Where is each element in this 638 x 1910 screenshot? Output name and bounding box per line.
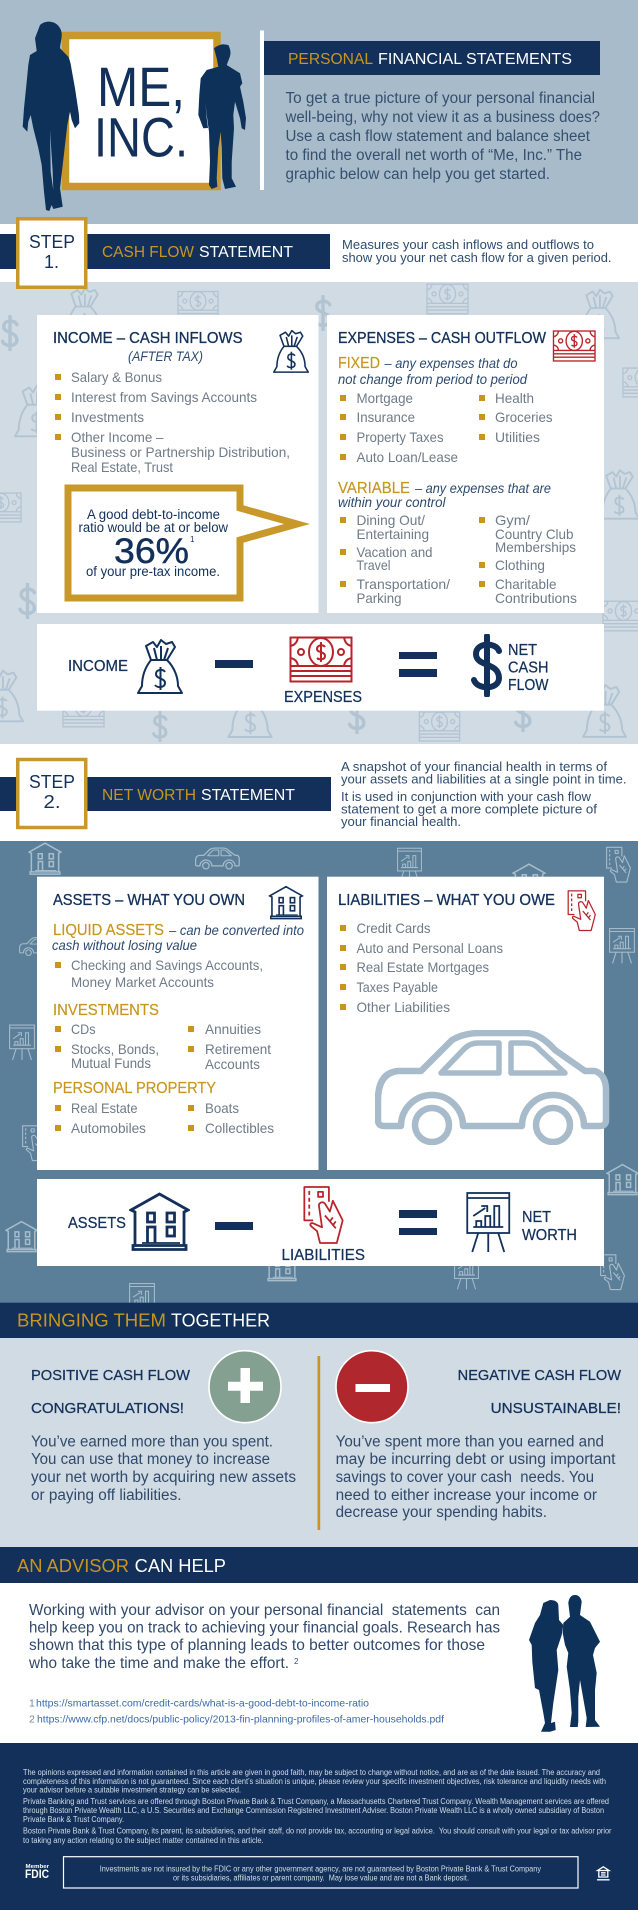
negative cash flow: NEGATIVE CASH FLOW: [458, 1368, 621, 1384]
liquid assets: Checking and Savings Accounts,: [71, 957, 263, 973]
icon: red money: [290, 637, 352, 682]
callout: debt-to-income: of your pre-tax income.: [86, 564, 220, 579]
step 1 navy bar: CASH FLOW: [102, 244, 195, 261]
callout: debt-to-income: 1: [190, 535, 195, 544]
net cash flow label: FLOW: [508, 677, 549, 694]
panel: income: [37, 315, 318, 613]
panel: assets: [37, 877, 318, 1170]
icon: money bag: [274, 331, 308, 372]
intro text: to find the overall net worth of “Me, Inc.” The: [286, 147, 582, 164]
intro text: [285, 90, 600, 183]
step 2 navy bar: STATEMENT: [201, 787, 295, 804]
step 2 box: [18, 760, 86, 828]
equation panel: net worth: [37, 1179, 604, 1266]
intro text: Use a cash flow statement and balance sheet: [286, 128, 591, 145]
negative cash flow: You’ve spent more than you earned and: [336, 1434, 604, 1451]
logo: Member FDIC: Member: [26, 1864, 49, 1870]
section 2 background: [0, 841, 638, 1318]
variable expenses: VARIABLE: [338, 480, 410, 497]
divider: gold line: [318, 1356, 320, 1530]
intro text: well-being, why not view it as a business does?: [285, 109, 600, 126]
negative cash flow: UNSUSTAINABLE!: [491, 1401, 621, 1417]
heading bar: personal financial statements: [264, 41, 600, 75]
disclosures: Private Bank & Trust Company.: [23, 1815, 124, 1824]
variable expenses: Dining Out/: [356, 512, 425, 528]
positive cash flow: your net worth by acquiring new assets: [31, 1469, 296, 1486]
income list: [55, 369, 290, 475]
advisor text: [28, 1602, 500, 1672]
step 1 box: 1.: [44, 252, 59, 272]
step 2 description: your financial health.: [341, 814, 461, 829]
net worth label: WORTH: [522, 1227, 577, 1244]
heading bar: personal financial statements: PERSONAL: [288, 51, 373, 68]
icon: equal housing: [597, 1867, 610, 1880]
heading: bringing them together: TOGETHER: [171, 1310, 270, 1330]
negative cash flow: need to either increase your income or: [336, 1487, 597, 1504]
liabilities list: Taxes Payable: [356, 979, 438, 995]
heading: bringing them together: [0, 1303, 638, 1338]
variable expenses: – any expenses that are: [414, 480, 551, 496]
heading bar: personal financial statements: FINANCIAL STATEMENTS: [378, 51, 572, 68]
positive cash flow: You’ve earned more than you spent.: [31, 1434, 273, 1451]
title: Me, Inc.: INC.: [94, 106, 188, 169]
fixed expenses: – any expenses that do: [384, 355, 518, 371]
variable expenses: Transportation/: [356, 576, 450, 592]
footnote links: 2: [29, 1714, 35, 1726]
icon: minus circle: [336, 1351, 408, 1423]
variable expenses: Memberships: [495, 539, 576, 555]
variable expenses: Clothing: [495, 557, 545, 573]
advisor text: Working with your advisor on your personal financial statements can: [29, 1602, 500, 1619]
liquid assets: cash without losing value: [52, 937, 197, 953]
panel: liabilities: [327, 877, 606, 1170]
negative cash flow: [336, 1351, 621, 1521]
divider line: [260, 30, 264, 190]
income heading: (AFTER TAX): [128, 349, 203, 364]
footnote links: [29, 1698, 444, 1726]
assets label: ASSETS: [68, 1215, 126, 1232]
step 1 box: [18, 219, 86, 287]
fixed expenses: [338, 355, 552, 465]
intro text: graphic below can help you get started.: [286, 166, 550, 183]
equals sign: [399, 652, 437, 677]
investments: Retirement: [205, 1041, 271, 1057]
step 1 description: [342, 237, 612, 265]
net cash flow label: CASH: [508, 660, 548, 676]
liabilities list: Auto and Personal Loans: [356, 940, 503, 956]
fixed expenses: Health: [495, 390, 534, 406]
silhouette: man: [198, 44, 246, 189]
background icon pattern: [0, 284, 638, 741]
minus sign: [215, 1222, 253, 1230]
intro text: To get a true picture of your personal financial: [286, 90, 595, 107]
heading: an advisor can help: AN ADVISOR: [17, 1556, 129, 1576]
liabilities list: Real Estate Mortgages: [356, 959, 489, 975]
negative cash flow: savings to cover your cash needs. You: [336, 1469, 594, 1486]
icon: dollar sign: [474, 636, 499, 695]
investment notice box: [64, 1857, 578, 1888]
footer: [0, 1743, 638, 1910]
personal property: Automobiles: [71, 1120, 146, 1136]
investments: Stocks, Bonds,: [71, 1041, 159, 1057]
icon: car: [378, 1033, 606, 1142]
callout: debt-to-income: 36%: [114, 532, 189, 571]
title: Me, Inc.: [94, 55, 188, 169]
income heading: [53, 330, 242, 364]
disclosures: to taking any action relating to the subject matter contained in this article.: [23, 1836, 264, 1845]
liabilities list: Credit Cards: [356, 920, 430, 936]
investments: [53, 1002, 271, 1072]
investment notice box: Investments are not insured by the FDIC or any other government agency, are not guaranteed by Boston Private Bank & Trust Company: [100, 1865, 541, 1874]
personal property: PERSONAL PROPERTY: [53, 1080, 216, 1097]
income heading: INCOME – CASH INFLOWS: [53, 330, 242, 347]
liquid assets: – can be converted into: [168, 922, 304, 938]
positive cash flow: You can use that money to increase: [31, 1451, 270, 1468]
net cash flow label: [508, 642, 549, 694]
investments: CDs: [71, 1021, 96, 1037]
income list: Real Estate, Trust: [71, 459, 173, 475]
income list: Other Income –: [71, 429, 164, 445]
net cash flow label: NET: [508, 642, 537, 659]
disclosures: completeness of this information is not guaranteed. Since each client’s situation is unique, please review your specific investment objectives, risk tolerance and liquidity needs with: [23, 1777, 606, 1786]
panel: advisor: [0, 1583, 638, 1743]
step 1 band: [0, 224, 638, 282]
investments: INVESTMENTS: [53, 1002, 159, 1019]
fixed expenses: Property Taxes: [356, 429, 444, 445]
section 1 background: [0, 282, 638, 744]
footnote links: https://www.cfp.net/docs/public-policy/2013-fin-planning-profiles-of-amer-households.pdf: [37, 1714, 444, 1726]
heading: bringing them together: BRINGING THEM: [17, 1310, 166, 1330]
positive cash flow: or paying off liabilities.: [31, 1487, 182, 1504]
step 2 description: A snapshot of your financial health in terms of: [341, 759, 607, 774]
fixed expenses: Insurance: [356, 409, 415, 425]
equals sign: [399, 1210, 437, 1235]
positive cash flow: POSITIVE CASH FLOW: [31, 1368, 190, 1384]
negative cash flow: decrease your spending habits.: [336, 1504, 547, 1521]
advisor text: who take the time and make the effort.: [28, 1655, 289, 1672]
fixed expenses: Groceries: [495, 409, 552, 425]
personal property: Real Estate: [71, 1100, 138, 1116]
variable expenses: within your control: [338, 494, 446, 510]
minus sign: [215, 660, 253, 668]
income label: INCOME: [68, 658, 128, 675]
fixed expenses: Mortgage: [356, 390, 413, 406]
panel: bringing them together: [0, 1338, 638, 1547]
income list: Interest from Savings Accounts: [71, 389, 257, 405]
step 2 description: your assets and liabilities at a single point in time.: [341, 772, 626, 786]
heading: an advisor can help: CAN HELP: [135, 1556, 226, 1576]
disclosures: The opinions expressed and information contained in this article are given in good faith, may be subject to change without notice, and are as of the date issued. The accuracy and: [23, 1768, 600, 1777]
icon: red money: [553, 331, 595, 361]
variable expenses: Parking: [356, 590, 402, 606]
equation panel: net cash flow: [37, 624, 604, 711]
variable expenses: Travel: [356, 557, 390, 573]
background icon pattern: [6, 843, 638, 1318]
investment notice box: or its subsidiaries, affiliates or parent company. May lose value and are not a Bank deposit.: [173, 1874, 469, 1883]
investments: Annuities: [205, 1021, 261, 1037]
step 1 navy bar: STATEMENT: [199, 244, 293, 261]
step 2 description: [341, 759, 626, 829]
fixed expenses: Auto Loan/Lease: [356, 449, 458, 465]
liabilities list: Other Liabilities: [356, 999, 450, 1015]
expenses label: EXPENSES: [284, 689, 362, 706]
fixed expenses: FIXED: [338, 355, 380, 372]
variable expenses: Country Club: [495, 526, 574, 542]
step 2 box: 2.: [44, 792, 60, 812]
callout: debt-to-income: A good debt-to-income: [87, 507, 220, 522]
assets heading: ASSETS – WHAT YOU OWN: [53, 892, 245, 909]
logo: Member FDIC: FDIC: [25, 1867, 49, 1881]
variable expenses: Gym/: [495, 512, 530, 528]
advisor text: 2: [294, 1657, 299, 1666]
title: Me, Inc.: ME,: [97, 55, 185, 118]
icon: credit card in hand: [304, 1187, 343, 1243]
icon: credit card in hand: [568, 891, 595, 930]
liquid assets: [52, 922, 304, 990]
silhouette: couple: [529, 1595, 600, 1732]
Me, Inc. logo with silhouettes: [23, 22, 246, 211]
disclosures: [23, 1768, 612, 1845]
step 2 description: statement to get a more complete picture of: [341, 802, 597, 816]
negative cash flow: may be incurring debt or using important: [336, 1451, 616, 1468]
step 1 description: Measures your cash inflows and outflows to: [342, 237, 594, 252]
liquid assets: Money Market Accounts: [71, 974, 214, 990]
variable expenses: [338, 480, 577, 606]
investments: Mutual Funds: [71, 1055, 151, 1071]
panel: expenses: [327, 315, 604, 613]
variable expenses: Vacation and: [356, 544, 432, 560]
footnote links: 1: [29, 1698, 35, 1710]
variable expenses: Entertaining: [356, 526, 429, 542]
net worth label: [522, 1209, 577, 1244]
step 2 description: It is used in conjunction with your cash flow: [341, 789, 592, 804]
step 1 box: STEP: [29, 232, 75, 252]
icon: money bag: [138, 640, 182, 693]
step 2 box: STEP: [29, 772, 75, 792]
personal property: Collectibles: [205, 1120, 274, 1136]
step 1 description: show you your net cash flow for a given period.: [342, 250, 612, 265]
expenses heading: EXPENSES – CASH OUTFLOW: [338, 330, 546, 347]
income list: Salary & Bonus: [71, 369, 162, 385]
fixed expenses: Utilities: [495, 429, 540, 445]
variable expenses: Charitable: [495, 576, 557, 592]
step 2 navy bar: [0, 777, 331, 811]
positive cash flow: CONGRATULATIONS!: [31, 1401, 184, 1417]
callout: debt-to-income: ratio would be at or below: [78, 520, 228, 535]
liabilities heading: LIABILITIES – WHAT YOU OWE: [338, 892, 555, 909]
advisor text: help keep you on track to achieving your financial goals. Research has: [29, 1620, 500, 1637]
liquid assets: LIQUID ASSETS: [53, 922, 164, 939]
icon: house: [270, 887, 302, 919]
investments: Accounts: [205, 1056, 260, 1072]
liabilities label: LIABILITIES: [282, 1247, 365, 1264]
icon: house: [131, 1194, 188, 1250]
income list: Investments: [71, 409, 144, 425]
personal property: Boats: [205, 1100, 239, 1116]
variable expenses: Contributions: [495, 590, 577, 606]
icon: chart on easel: [467, 1193, 509, 1252]
step 2 navy bar: NET WORTH: [102, 787, 196, 804]
step 1 navy bar: [0, 234, 330, 269]
liabilities list: [340, 920, 503, 1015]
step 2 band: [0, 744, 638, 841]
heading: an advisor can help: [0, 1547, 638, 1583]
advisor text: shown that this type of planning leads to better outcomes for those: [29, 1637, 485, 1654]
footnote links: https://smartasset.com/credit-cards/what-is-a-good-debt-to-income-ratio: [36, 1698, 369, 1710]
silhouette: woman: [23, 22, 79, 211]
fixed expenses: not change from period to period: [338, 371, 528, 387]
gold frame: [66, 36, 217, 186]
disclosures: your advisor before a suitable investment strategy can be selected.: [23, 1786, 241, 1795]
header section background: [0, 0, 638, 224]
positive cash flow: [31, 1351, 296, 1504]
personal property: [53, 1080, 274, 1136]
net worth label: NET: [522, 1209, 551, 1226]
income list: Business or Partnership Distribution,: [71, 444, 290, 460]
callout: debt-to-income: [68, 488, 297, 598]
icon: plus circle: [209, 1351, 281, 1423]
